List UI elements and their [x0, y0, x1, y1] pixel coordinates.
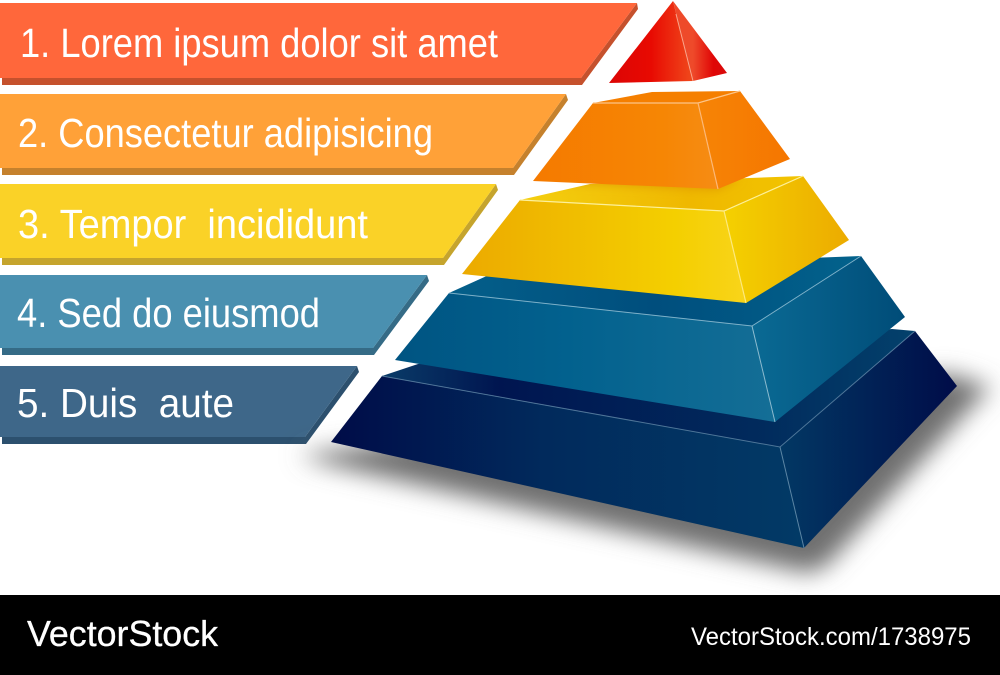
banner 4: Sed do: [0, 275, 429, 355]
pyramid tier 5: navy: [331, 329, 957, 548]
footer bar: [0, 595, 1000, 675]
label 1: 1. Lorem ipsum dolor sit amet: [20, 20, 499, 66]
banner 5: Duis aute: [0, 366, 359, 444]
label 2: 2. Consectetur adipisicing: [18, 110, 433, 156]
pyramid tier 1: red top: [609, 1, 727, 83]
label 5: 5. Duis aute: [17, 380, 234, 426]
pyramid tier 2: orange: [533, 91, 790, 189]
pyramid tier 4: blue: [395, 256, 905, 422]
image url: VectorStock.com/1738975: [691, 623, 971, 651]
banner 2: Consectetur: [0, 94, 568, 175]
VectorStock logo: VectorStock: [27, 613, 219, 654]
pyramid drop shadow: [298, 374, 992, 573]
banner 3: Tempor: [0, 184, 498, 265]
label 3: 3. Tempor incididunt: [18, 201, 369, 247]
banner 1: Lorem ipsum: [0, 3, 638, 85]
label 4: 4. Sed do eiusmod: [17, 290, 320, 336]
pyramid tier 3: yellow: [462, 170, 849, 303]
